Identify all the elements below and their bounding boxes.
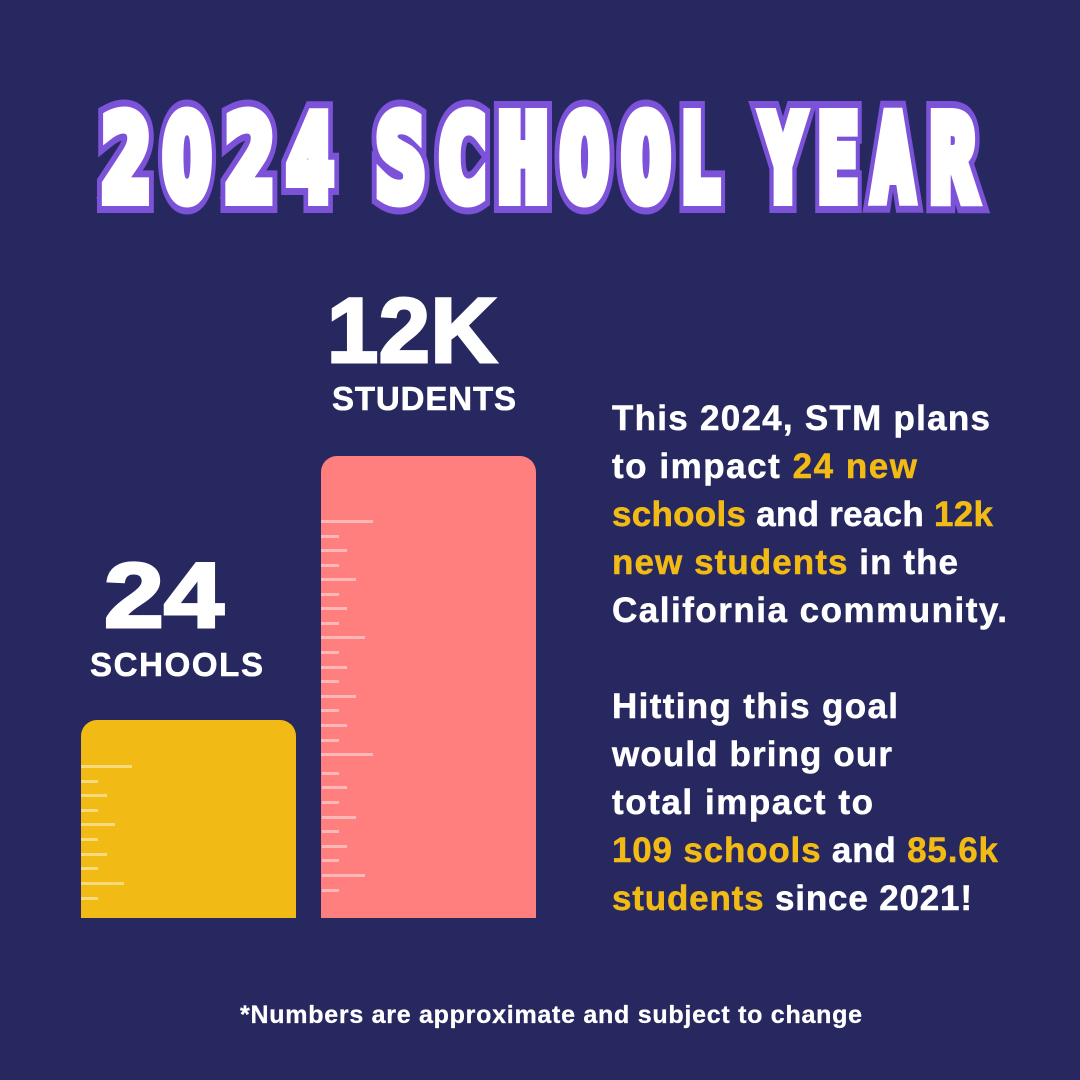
title: C [438,94,486,227]
title: 4 [287,93,333,227]
text block: 2024 plans: to impact 24 new [612,447,918,486]
title: E [818,94,858,227]
stat: 12K students: 12K [327,280,497,382]
title: Y [762,94,804,227]
stat: 24 schools [90,544,263,683]
text block: total impact: 109 schools and 85.6k [612,831,999,870]
title: S [376,94,425,227]
text block: total impact: total impact to [612,783,873,822]
title: 2 [226,94,274,227]
text block: total impact [611,687,999,918]
text block: 2024 plans: schools and reach 12k [612,495,994,534]
title: L [680,93,720,227]
title: O [561,93,608,227]
stat: 24 schools: SCHOOLS [90,646,263,683]
title: H [498,92,548,227]
text block: 2024 plans: California community. [612,591,1007,630]
title: 2 [226,94,274,227]
title: C [438,94,486,227]
title: A [872,93,914,227]
text block: 2024 plans: new students in the [612,543,958,582]
title: 0 [163,93,211,227]
text block: total impact: Hitting this goal [612,687,898,726]
title: R [930,92,976,226]
text block: 2024 plans [612,399,1007,630]
stat: 12K students [327,280,516,417]
bar: schools [81,720,296,918]
title: H [498,92,548,227]
title: R [930,92,976,226]
title: 2 [102,94,151,227]
text block: 2024 plans: This 2024, STM plans [612,399,990,438]
title: E [818,94,858,227]
text block: total impact: would bring our [611,735,892,774]
bar: students [321,456,536,918]
title: O [622,93,670,227]
title: O [622,93,670,227]
title [102,92,976,227]
footnote: *Numbers are approximate and subject to change [240,1001,862,1029]
text block: total impact: students since 2021! [612,879,972,918]
title: S [376,94,425,227]
title: 4 [287,93,333,227]
title: O [561,93,608,227]
title: 2 [102,94,151,227]
title: A [872,93,914,227]
stat: 12K students: STUDENTS [332,380,516,417]
title: L [680,93,720,227]
stat: 24 schools: 24 [104,544,224,647]
title: Y [762,94,804,227]
title: 0 [163,93,211,227]
